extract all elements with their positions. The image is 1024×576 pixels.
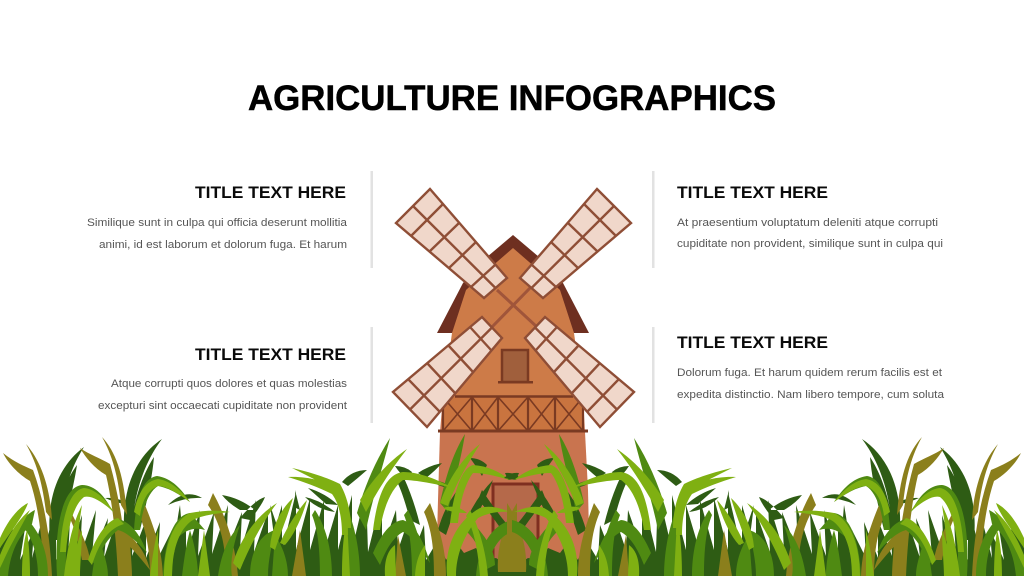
text block: bottom right: TITLE TEXT HERE [677, 333, 828, 352]
text block: top left: animi, id est laborum et dolorum fuga. Et harum [99, 239, 347, 251]
text block: top right: cupiditate non provident, similique sunt in culpa qui [677, 238, 943, 250]
grass: right half [504, 434, 1024, 576]
text block: top right: At praesentium voluptatum deleniti atque corrupti [677, 217, 938, 229]
sail: bottom right [525, 317, 634, 427]
text block: top right: TITLE TEXT HERE [677, 183, 828, 202]
sail: top left [396, 189, 507, 298]
windmill cap [443, 248, 583, 398]
text block: bottom right: Dolorum fuga. Et harum quidem rerum facilis est et [677, 367, 943, 379]
windmill [393, 189, 634, 576]
text block: bottom left: TITLE TEXT HERE [195, 345, 346, 364]
sail: top right [520, 189, 631, 298]
title: AGRICULTURE INFOGRAPHICS [248, 79, 776, 118]
text block: bottom left: Atque corrupti quos dolores et quas molestias [111, 378, 347, 390]
windmill window [498, 350, 533, 384]
text block: bottom left [98, 345, 348, 412]
text block: top left: Similique sunt in culpa qui officia deserunt mollitia [87, 217, 348, 229]
sail: bottom left [393, 317, 502, 427]
text block: bottom right [677, 333, 945, 401]
windmill roof [437, 235, 589, 333]
text block: top left: TITLE TEXT HERE [195, 183, 346, 202]
text block: top left [87, 183, 348, 251]
text block: bottom left: excepturi sint occaecati cupiditate non provident [98, 400, 348, 412]
text block: bottom right: expedita distinctio. Nam libero tempore, cum soluta [677, 389, 945, 401]
windmill gallery [438, 396, 588, 431]
windmill door [493, 484, 538, 569]
grass: left half [0, 434, 520, 576]
windmill sail spokes [492, 288, 537, 327]
windmill tower [436, 396, 590, 576]
text block: top right [677, 183, 943, 250]
